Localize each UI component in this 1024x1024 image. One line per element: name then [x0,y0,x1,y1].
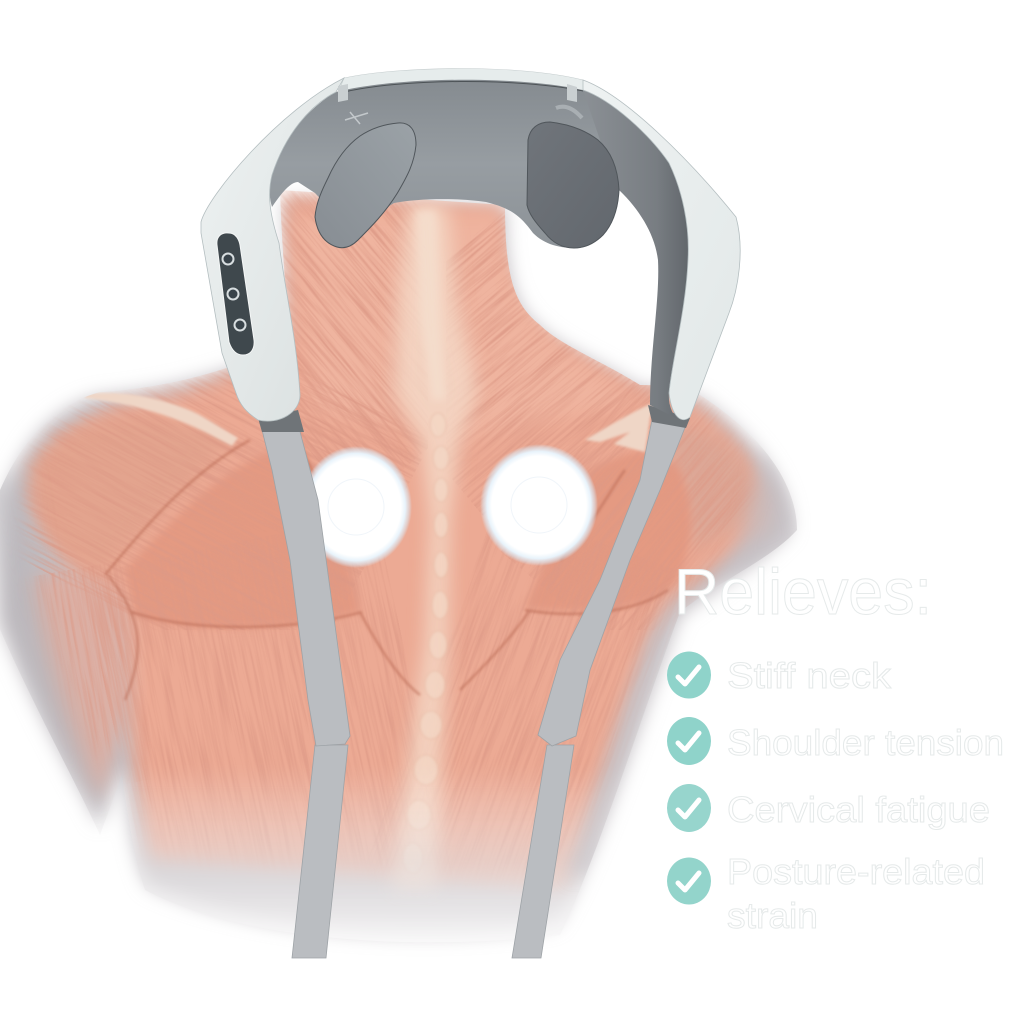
central spine pale band [392,205,478,890]
right deltoid [673,426,754,544]
hinge texture left [345,112,368,124]
heat glow: right [480,444,598,566]
fibre texture: right lat [447,536,656,817]
gray inner band [269,80,620,248]
upper spine highlight [416,210,446,400]
right strap [512,405,690,958]
fibre texture: left shoulder [22,370,419,630]
neck highlight [302,222,610,430]
heat glow: left [300,446,412,568]
fibre texture: left neck [280,190,416,459]
muscle fibre textures [22,190,740,832]
fibre texture: left arm [38,568,145,750]
right gray band [583,90,688,418]
fibre texture: right neck [450,214,650,508]
item: posture-related strain: strain [727,895,818,936]
item: shoulder tension [667,717,1004,765]
band top seam [340,81,583,93]
right trapezius lower fold [525,451,691,611]
fibre texture: left lat [82,575,408,816]
spine vertebrae [409,460,448,818]
left deltoid [20,414,204,567]
control panel [217,233,254,355]
hinge texture right [556,107,582,118]
fibre texture: right shoulder [509,382,740,629]
item: stiff neck: Stiff neck [727,655,892,696]
item: stiff neck [667,652,892,698]
left strap [258,410,350,958]
left seam [338,84,348,102]
left arm grey fade [0,470,100,840]
benefits checklist [667,652,1004,936]
item: shoulder tension: Shoulder tension [727,722,1004,763]
left white pod [201,78,344,421]
left arm [30,571,132,800]
neck massager device [201,68,740,421]
relieves heading: Relieves: [674,555,932,628]
button 2 [228,288,238,300]
right shoulder grey fade [729,448,797,578]
left trapezius lower fold [125,440,360,628]
left massage pad [315,123,416,248]
right white pod [583,80,740,420]
item: cervical fatigue [667,784,990,832]
item: cervical fatigue: Cervical fatigue [727,789,990,830]
button 3 [234,320,246,330]
muscle base layer [0,190,797,940]
right seam [567,84,577,102]
lower back fade [129,780,598,940]
left clavicle tendon [85,393,238,446]
right clavicle tendon [585,402,655,452]
item: posture-related strain [667,851,985,936]
body silhouette halo [0,200,790,935]
right torso grey fade [571,591,688,878]
muscle shadow lines [105,440,668,700]
button 1 [222,254,234,264]
top rim [336,68,590,98]
human back muscle anatomy [0,190,798,944]
right massage pad [527,122,619,248]
item: posture-related strain: Posture-related [727,851,985,892]
